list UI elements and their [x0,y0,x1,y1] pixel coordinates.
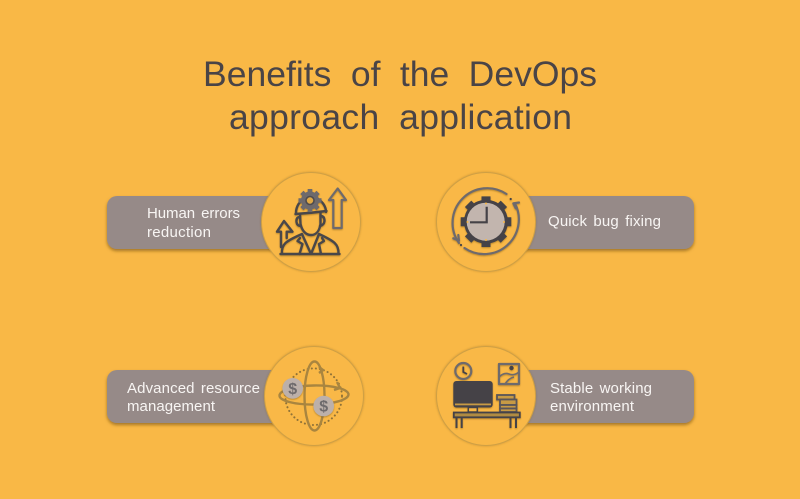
label text [127,380,260,415]
label text [550,380,652,415]
label text [147,205,240,241]
icon circle [436,346,536,446]
panel: quick bug fixing [436,172,694,272]
desk [454,412,520,428]
label pill [500,370,694,423]
label text: Human errors [147,205,240,222]
panel: advanced resource management [107,346,364,446]
panel: human errors reduction [107,172,360,272]
icon: globe orbits with coins [279,362,349,430]
label pill [500,196,694,249]
icon: engineer with gear and arrows [277,188,346,254]
icon: desk with monitor, clock, picture and books [453,363,520,428]
title: approach application [229,97,572,137]
title: Benefits of the DevOps [203,54,597,94]
panel: stable working environment [436,346,694,446]
title [203,54,597,137]
wall clock [455,363,471,379]
clock face [467,203,505,241]
label text: environment [550,398,635,415]
icon circle [264,346,364,446]
label text: Quick bug fixing [548,213,661,230]
books [497,395,516,412]
icon circle [436,172,536,272]
icon: clock gear with cycle arrows [453,188,519,254]
picture [499,364,519,384]
coin: $ [319,399,328,416]
gear [298,189,322,212]
label text: reduction [147,224,211,241]
label pill [107,196,297,249]
monitor [453,381,493,412]
icon circle [262,172,360,272]
coin: $ [288,381,297,398]
label text: Stable working [550,380,652,397]
gear body [461,196,511,247]
label text: management [127,398,216,415]
label text: Advanced resource [127,380,260,397]
label pill [107,370,297,423]
